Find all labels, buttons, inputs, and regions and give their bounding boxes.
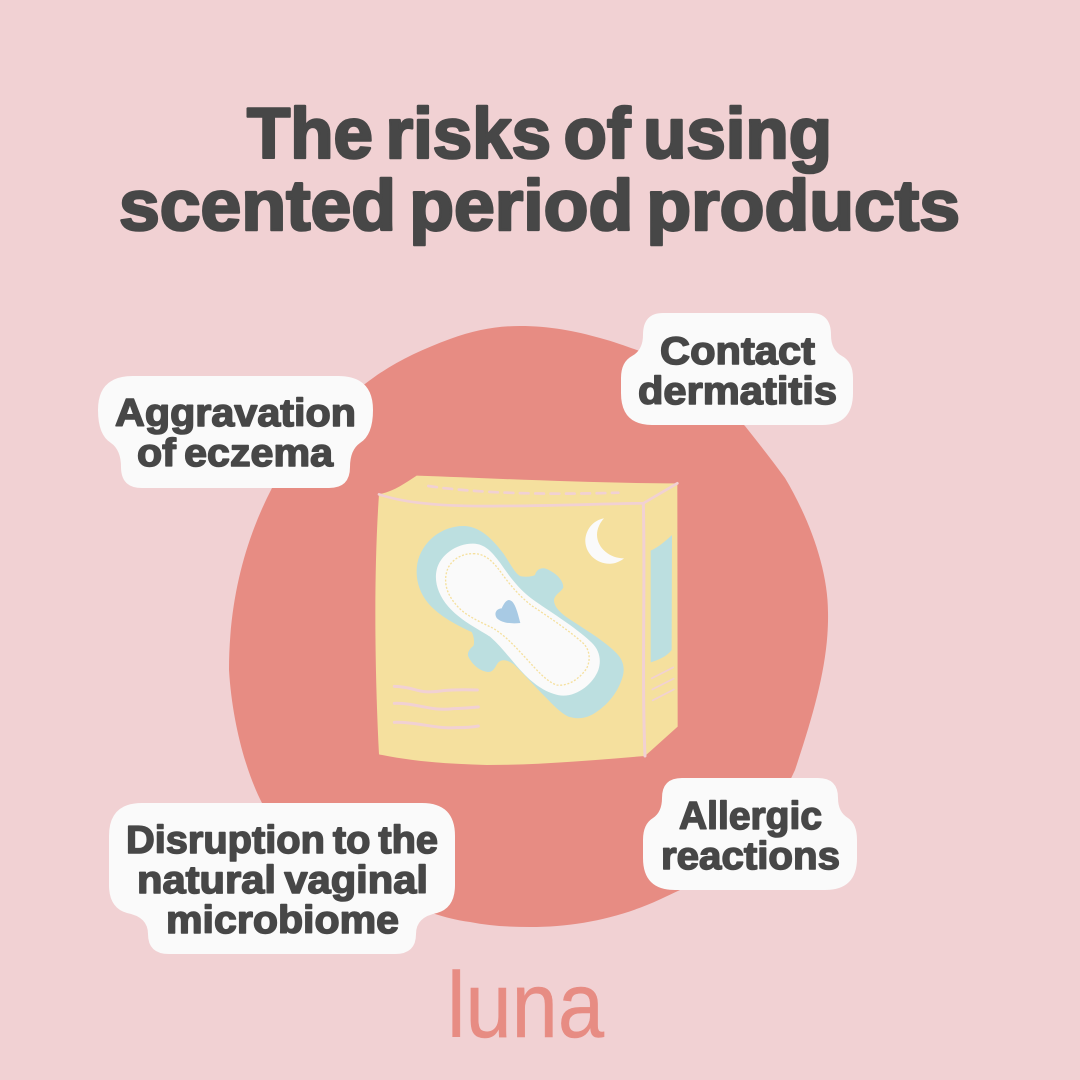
callout: aggravation of eczema: of eczema bbox=[137, 432, 334, 475]
callout: allergic reactions: Allergic bbox=[679, 795, 822, 838]
illustration: scented pad package bbox=[375, 476, 678, 765]
pad stitching bbox=[446, 554, 589, 685]
logo: luna: luna bbox=[447, 953, 604, 1057]
callout: disruption to the natural vaginal microbiome: microbiome bbox=[166, 899, 399, 942]
callout: contact dermatitis: Contact bbox=[660, 330, 815, 373]
package body bbox=[375, 476, 678, 765]
callout: allergic reactions bbox=[643, 778, 857, 890]
callout: contact dermatitis bbox=[621, 313, 853, 425]
callout: contact dermatitis: dermatitis bbox=[638, 370, 837, 413]
callout: disruption to the natural vaginal microbiome: natural vaginal bbox=[137, 859, 428, 902]
background blob bbox=[229, 326, 828, 927]
pad wings and backing bbox=[417, 526, 624, 718]
title: The risks of using bbox=[247, 95, 832, 174]
callout: aggravation of eczema: Aggravation bbox=[115, 392, 356, 435]
callout: allergic reactions: reactions bbox=[661, 835, 840, 878]
pad core bbox=[436, 544, 600, 696]
side window bbox=[651, 535, 672, 662]
callout: aggravation of eczema bbox=[98, 376, 373, 488]
moon bbox=[585, 518, 624, 564]
title bbox=[119, 95, 960, 246]
callout: disruption to the natural vaginal microbiome bbox=[109, 803, 455, 954]
package edges bbox=[379, 483, 677, 756]
heart bbox=[495, 600, 520, 623]
title: scented period products bbox=[119, 167, 960, 246]
callout: disruption to the natural vaginal microbiome: Disruption to the bbox=[126, 819, 438, 862]
